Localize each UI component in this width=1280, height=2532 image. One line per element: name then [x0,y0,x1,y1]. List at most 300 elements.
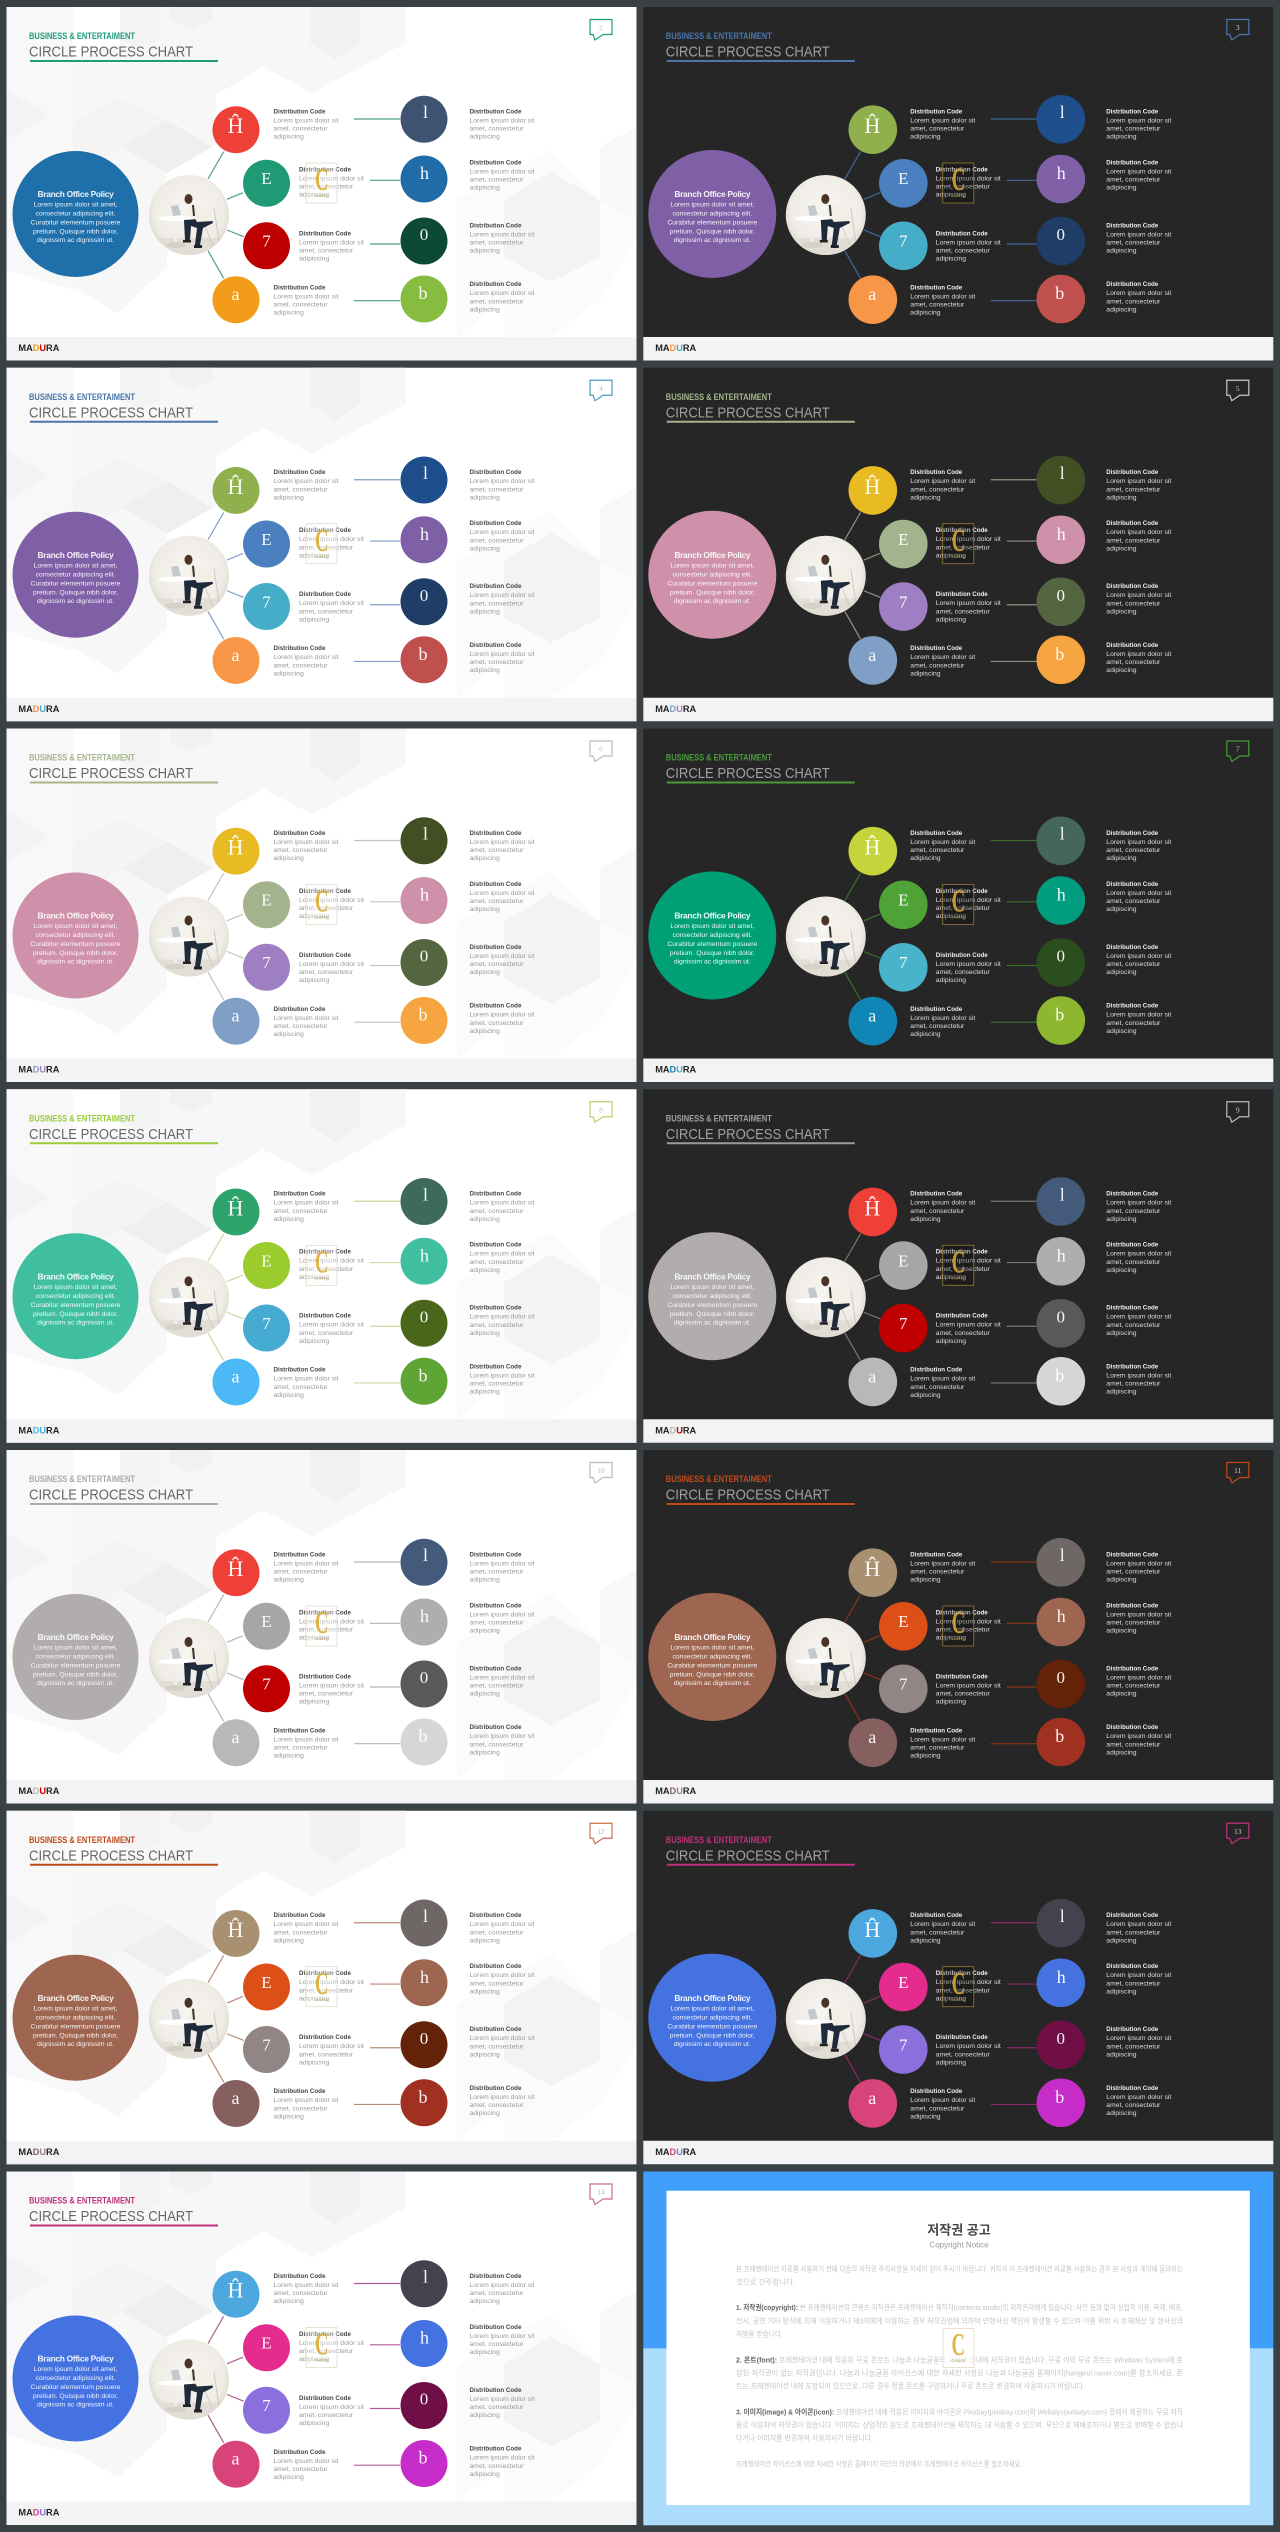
photo [786,896,866,978]
node b [1036,2078,1085,2127]
node E: E [898,890,908,910]
text: right 4: Lorem ipsum dolor sit [1106,1733,1171,1740]
text: branch 3: amet, consectetur [936,1691,991,1698]
text: right 3: Lorem ipsum dolor sit [1106,1674,1171,1681]
text: right 4: amet, consectetur [470,1381,524,1388]
text: branch 4: adipiscing [274,2113,304,2120]
slide 5 [643,368,1273,721]
page icon [590,1462,612,1483]
node h: h [420,1606,429,1626]
main circle: Lorem ipsum dolor sit amet, [34,923,118,930]
text: right 4: amet, consectetur [470,2102,524,2109]
node h: h [420,884,429,904]
node 0 [1036,1299,1085,1348]
title: CIRCLE PROCESS CHART [666,1486,830,1504]
text: right 1: Lorem ipsum dolor sit [470,1560,535,1567]
main circle: pretium. Quisque nibh dolor, [33,1311,118,1318]
page icon: 13 [1234,1827,1242,1836]
node 7: 7 [262,232,271,251]
text: branch 1: Distribution Code [274,830,326,837]
node h [400,516,448,563]
text: right 3: adipiscing [1106,2051,1137,2058]
node H: Ĥ [228,1195,244,1220]
footer logo: MADURA [18,1425,60,1435]
node l [1036,816,1085,865]
text: right 4: adipiscing [470,1749,500,1756]
text: right 1: Distribution Code [1106,1551,1159,1558]
text: branch 4: Distribution Code [910,645,963,652]
text: branch 3: amet, consectetur [936,969,991,976]
text: right 1: Lorem ipsum dolor sit [470,478,535,485]
node l [400,1539,448,1586]
eyebrow: BUSINESS & ENTERTAIMENT [666,752,772,762]
main circle: consectetur adipiscing elit. [36,571,115,578]
main circle: Branch Office Policy [38,189,114,199]
page icon [1227,1102,1249,1122]
text: branch 2: amet, consectetur [936,1266,991,1273]
text: branch 2: Lorem ipsum dolor sit [936,1979,1001,1986]
text: right 3: Lorem ipsum dolor sit [1106,231,1171,238]
node h [1036,515,1085,564]
text: right 4: amet, consectetur [1106,1381,1161,1388]
node l [1036,1899,1085,1947]
text: branch 1: adipiscing [910,1577,941,1584]
node h [400,1598,448,1646]
text: branch 3: amet, consectetur [936,608,991,615]
title: CIRCLE PROCESS CHART [29,765,193,782]
title: CIRCLE PROCESS CHART [29,44,193,60]
text: branch 2: adipiscing [299,1635,329,1642]
text: right 3: adipiscing [1106,248,1137,255]
text: branch 3: Lorem ipsum dolor sit [299,961,364,968]
text: branch 2: amet, consectetur [299,1987,354,1994]
node H: Ĥ [864,113,880,138]
eyebrow: BUSINESS & ENTERTAIMENT [29,1835,135,1845]
text: right 4: adipiscing [470,667,500,674]
node 0: 0 [420,586,428,605]
text: branch 1: Lorem ipsum dolor sit [910,839,975,846]
title: CIRCLE PROCESS CHART [29,1847,193,1864]
text: right 2: amet, consectetur [470,537,524,544]
text: branch 3: Distribution Code [936,952,988,959]
text: branch 2: adipiscing [936,1635,966,1642]
text: right 2: Lorem ipsum dolor sit [470,1251,535,1258]
photo [149,1618,229,1699]
main circle: consectetur adipiscing elit. [36,2375,115,2382]
node l: l [423,1545,428,1565]
text: right 1: adipiscing [1106,855,1137,862]
text: right 4: Distribution Code [1106,2085,1159,2092]
text: branch 1: Lorem ipsum dolor sit [910,478,975,485]
text: branch 1: Distribution Code [274,2273,326,2280]
text: branch 1: Distribution Code [910,1912,963,1919]
node l [1036,1538,1085,1587]
footer logo: MADURA [655,1064,697,1074]
main circle: Lorem ipsum dolor sit amet, [670,2005,754,2012]
text: branch 1: Distribution Code [910,830,963,837]
node b [1036,275,1085,323]
watermark stamp: C [315,882,328,918]
text: branch 1: adipiscing [274,855,304,862]
node a [848,2079,897,2128]
text: right 3: amet, consectetur [470,961,524,968]
text: branch 3: Lorem ipsum dolor sit [299,600,364,607]
photo [149,175,229,256]
text: branch 3: Lorem ipsum dolor sit [936,1322,1001,1329]
text: right 3: Lorem ipsum dolor sit [1106,1314,1171,1321]
main circle: dignissim ac dignissim ut. [674,237,751,244]
text: right 1: amet, consectetur [1106,1929,1161,1936]
text: right 2: adipiscing [470,906,500,913]
node b: b [1055,1004,1064,1024]
slide 4 [6,368,636,721]
main circle: Branch Office Policy [38,550,114,560]
text: branch 1: amet, consectetur [910,1208,965,1215]
node H: Ĥ [228,1556,244,1581]
page icon: 2 [599,23,603,32]
main circle: Curabitur elementum posuere [31,220,121,226]
connectors [845,840,1037,1022]
slide 6 [6,728,636,1082]
eyebrow: BUSINESS & ENTERTAIMENT [29,1113,135,1123]
text: right 3: Lorem ipsum dolor sit [1106,2035,1171,2042]
text: branch 4: amet, consectetur [910,1745,965,1752]
text: right 3: amet, consectetur [470,2043,524,2050]
text: branch 4: amet, consectetur [910,302,965,309]
page icon: 11 [1234,1466,1242,1475]
node l [1036,1177,1085,1226]
node h: h [420,163,429,183]
main circle: Curabitur elementum posuere [31,580,121,587]
main circle: Lorem ipsum dolor sit amet, [670,562,754,569]
main circle: Curabitur elementum posuere [667,220,757,226]
connectors [208,840,400,1022]
text: branch 1: adipiscing [274,2298,304,2305]
text: branch 3: Distribution Code [936,2034,988,2041]
text: branch 1: amet, consectetur [274,847,328,854]
text: right 4: adipiscing [470,306,500,313]
text: right 1: Lorem ipsum dolor sit [470,1200,535,1207]
node E: E [261,169,272,188]
text: branch 2: adipiscing [299,913,329,920]
text: branch 4: Distribution Code [910,1367,963,1374]
node 0 [400,1660,448,1708]
copyright section 1: 1. 저작권(copyright): 본 프레젠테이션의 콘텐츠 저작권은 프레젠테이션 제작자(contents studio)의 저작권자에게 있습니다. 사전 동의 없이 상업적 이용, 복제, 배포, [736,2302,1183,2312]
text: branch 3: amet, consectetur [299,969,354,976]
text: branch 4: Distribution Code [910,284,963,291]
text: right 4: Distribution Code [470,642,522,649]
text: branch 1: Lorem ipsum dolor sit [910,1921,975,1928]
text: branch 2: amet, consectetur [936,544,991,551]
node 7 [243,222,290,269]
text: branch 4: amet, consectetur [910,662,965,669]
node H [212,1910,260,1957]
main circle: Lorem ipsum dolor sit amet, [34,562,118,569]
main circle [12,1233,138,1359]
text: branch 1: amet, consectetur [910,126,965,133]
text: right 1: amet, consectetur [470,1569,524,1576]
text: right 3: amet, consectetur [1106,600,1161,607]
node 0: 0 [420,1668,428,1687]
slide 14 [6,2172,636,2525]
text: right 1: amet, consectetur [1106,1208,1161,1215]
text: branch 1: amet, consectetur [274,126,328,133]
watermark stamp [943,2326,974,2368]
text: right 4: adipiscing [1106,2110,1137,2117]
text: branch 3: adipiscing [936,616,966,623]
watermark stamp: CHOICE [951,1276,966,1280]
text: branch 3: Lorem ipsum dolor sit [299,1682,364,1689]
text: right 2: Lorem ipsum dolor sit [470,168,535,175]
text: right 1: adipiscing [1106,1216,1137,1223]
watermark stamp: C [952,522,965,558]
text: right 4: adipiscing [470,2471,500,2478]
text: branch 1: Distribution Code [274,1912,326,1919]
node l: l [1060,463,1065,483]
node E: E [898,1612,908,1631]
text: right 4: Lorem ipsum dolor sit [1106,651,1171,658]
text: right 2: amet, consectetur [470,177,524,184]
text: right 1: amet, consectetur [470,1929,524,1936]
text: branch 3: adipiscing [936,1338,966,1345]
text: right 1: Lorem ipsum dolor sit [1106,478,1171,485]
text: right 2: amet, consectetur [470,1259,524,1266]
text: branch 3: adipiscing [299,256,329,263]
text: right 4: amet, consectetur [470,1741,524,1748]
text: branch 3: amet, consectetur [299,1691,354,1698]
text: right 4: Lorem ipsum dolor sit [1106,1372,1171,1379]
text: branch 2: Lorem ipsum dolor sit [936,536,1001,543]
text: branch 4: adipiscing [274,2474,304,2481]
watermark stamp: CHOICE [951,916,966,920]
text: right 4: Lorem ipsum dolor sit [470,290,535,297]
node a [848,997,897,1046]
text: right 2: Lorem ipsum dolor sit [1106,890,1171,897]
node l: l [423,824,428,844]
text: right 2: Distribution Code [1106,1242,1159,1249]
text: branch 3: Distribution Code [936,591,988,598]
text: branch 2: Lorem ipsum dolor sit [299,1618,364,1625]
connectors [208,1923,400,2104]
text: right 2: amet, consectetur [1106,898,1161,905]
text: branch 1: Distribution Code [910,469,963,476]
node a [212,2080,260,2127]
text: branch 2: amet, consectetur [299,1266,354,1273]
text: right 1: Lorem ipsum dolor sit [470,839,535,846]
watermark stamp: CHOICE [951,194,966,198]
text: right 2: Distribution Code [1106,881,1159,888]
text: right 1: adipiscing [1106,1937,1137,1944]
node H [212,106,260,153]
node a [212,276,260,323]
text: branch 1: adipiscing [274,1216,304,1223]
text: right 2: Lorem ipsum dolor sit [470,2333,535,2340]
node 0: 0 [1057,225,1065,244]
node b: b [1055,644,1064,664]
node H: Ĥ [864,1917,880,1942]
main circle: pretium. Quisque nibh dolor, [670,2032,755,2039]
node h [400,877,448,924]
text: branch 4: Lorem ipsum dolor sit [274,1376,339,1383]
text: branch 4: Lorem ipsum dolor sit [910,293,975,300]
text: right 1: Lorem ipsum dolor sit [470,117,535,124]
eyebrow: BUSINESS & ENTERTAIMENT [666,1835,772,1845]
main circle: dignissim ac dignissim ut. [674,1680,751,1687]
node h: h [1057,1245,1066,1265]
text: branch 1: adipiscing [910,134,941,141]
node 0: 0 [1057,1307,1065,1326]
text: right 2: adipiscing [1106,1988,1137,1995]
node b [400,1358,448,1405]
text: branch 3: Distribution Code [936,230,988,237]
page icon [1227,1823,1249,1844]
text: branch 2: adipiscing [299,2356,329,2363]
text: right 1: Distribution Code [470,469,522,476]
slide 7 [643,728,1273,1082]
text: right 1: amet, consectetur [1106,486,1161,493]
watermark stamp: CHOICE [952,2359,966,2363]
node H: Ĥ [864,1195,880,1220]
main circle: dignissim ac dignissim ut. [674,598,751,605]
text: branch 3: amet, consectetur [299,2412,354,2419]
text: right 4: adipiscing [470,1389,500,1396]
eyebrow: BUSINESS & ENTERTAIMENT [29,31,135,41]
node l [400,457,448,504]
text: right 4: amet, consectetur [1106,1020,1161,1027]
node H [848,827,897,876]
main circle [12,151,138,277]
footer logo: MADURA [18,1786,60,1796]
watermark stamp: CHOICE [315,555,329,559]
node 0: 0 [1057,946,1065,966]
text: right 4: Distribution Code [1106,281,1159,288]
main circle [12,512,138,638]
connectors [845,1923,1037,2104]
main circle: dignissim ac dignissim ut. [37,2041,114,2048]
text: right 2: adipiscing [1106,906,1137,913]
node H: Ĥ [228,834,244,860]
watermark stamp [943,1965,974,2007]
node 7: 7 [262,1675,271,1694]
slide 10 [6,1450,636,1804]
copyright heading: 저작권 공고 [927,2222,991,2238]
text: branch 2: Distribution Code [936,1249,988,1256]
node 0 [400,939,448,986]
title: CIRCLE PROCESS CHART [666,1126,830,1143]
node a: a [232,645,240,665]
node b: b [418,1365,428,1385]
text: branch 2: Lorem ipsum dolor sit [936,1258,1001,1265]
text: right 1: Lorem ipsum dolor sit [470,2282,535,2289]
title: CIRCLE PROCESS CHART [666,765,830,782]
main circle [12,872,138,998]
photo [786,536,866,617]
text: right 2: Distribution Code [1106,1602,1159,1609]
text: right 1: Distribution Code [470,1912,522,1919]
footer logo: MADURA [18,704,60,714]
text: branch 2: amet, consectetur [299,2348,354,2355]
node 0 [400,2382,448,2429]
node 0: 0 [420,225,428,244]
text: branch 3: amet, consectetur [299,2051,354,2058]
node b [400,997,448,1044]
text: branch 2: adipiscing [936,1274,966,1281]
main circle: Curabitur elementum posuere [31,2384,121,2391]
text: branch 4: adipiscing [274,670,304,677]
node 7: 7 [899,953,908,972]
page icon: 10 [597,1466,605,1475]
main circle [648,872,776,1000]
node E: E [898,169,908,188]
text: right 2: Lorem ipsum dolor sit [1106,1972,1171,1979]
text: right 4: Lorem ipsum dolor sit [470,651,535,658]
copyright section 2: 함된 저작권이 없는 저작권입니다. 나눔과 나눔글꼴 라이선스에 대한 자세한 사항은 나눔과 나눔글꼴 홈페이지(hangeul.naver.com)를 참조하세요. 폰 [736,2367,1183,2377]
text: right 3: Distribution Code [470,1665,522,1672]
text: branch 1: Distribution Code [274,1191,326,1198]
node a: a [232,2088,240,2108]
text: branch 3: Distribution Code [299,2034,351,2041]
text: right 4: amet, consectetur [1106,2102,1161,2109]
text: branch 2: Lorem ipsum dolor sit [936,1618,1001,1625]
main circle: Branch Office Policy [38,910,114,920]
connectors [208,1201,400,1383]
main circle: Curabitur elementum posuere [667,580,757,587]
node l: l [1060,1906,1065,1926]
text: branch 2: Lorem ipsum dolor sit [299,175,364,182]
footer logo: MADURA [655,1425,697,1435]
node H: Ĥ [228,1917,244,1942]
node 7: 7 [262,2396,271,2415]
watermark stamp: C [315,1965,328,2001]
node a [848,275,897,324]
node 0: 0 [1057,1668,1065,1687]
node H: Ĥ [864,834,880,860]
title: CIRCLE PROCESS CHART [29,404,193,421]
node 7: 7 [262,592,271,611]
footer logo: MADURA [18,1064,60,1074]
text: right 2: adipiscing [1106,1628,1137,1635]
text: right 3: Distribution Code [470,583,522,590]
node a: a [232,1366,240,1386]
watermark stamp [306,1965,337,2007]
node l [400,817,448,864]
text: right 1: adipiscing [470,494,500,501]
node h: h [420,2328,429,2348]
text: branch 4: adipiscing [910,310,941,317]
watermark stamp [943,161,974,203]
node a [212,1358,260,1405]
text: branch 4: Distribution Code [274,1727,326,1734]
main circle: Curabitur elementum posuere [31,2023,121,2030]
text: right 3: Distribution Code [470,2387,522,2394]
text: right 1: Lorem ipsum dolor sit [470,1921,535,1928]
text: branch 2: Lorem ipsum dolor sit [299,897,364,904]
text: right 3: Lorem ipsum dolor sit [470,2396,535,2403]
text: branch 2: amet, consectetur [299,905,354,912]
node a: a [232,1727,240,1747]
text: right 2: Distribution Code [1106,520,1159,527]
text: right 4: Distribution Code [1106,1724,1159,1731]
photo [786,1257,866,1338]
text: branch 4: adipiscing [274,1392,304,1399]
text: right 2: Distribution Code [1106,159,1159,166]
node 7 [243,1665,290,1712]
node E: E [261,1973,272,1992]
text: branch 4: Lorem ipsum dolor sit [910,1376,975,1383]
title: CIRCLE PROCESS CHART [29,1126,193,1143]
node E [243,2324,290,2371]
main circle: Lorem ipsum dolor sit amet, [670,202,754,208]
